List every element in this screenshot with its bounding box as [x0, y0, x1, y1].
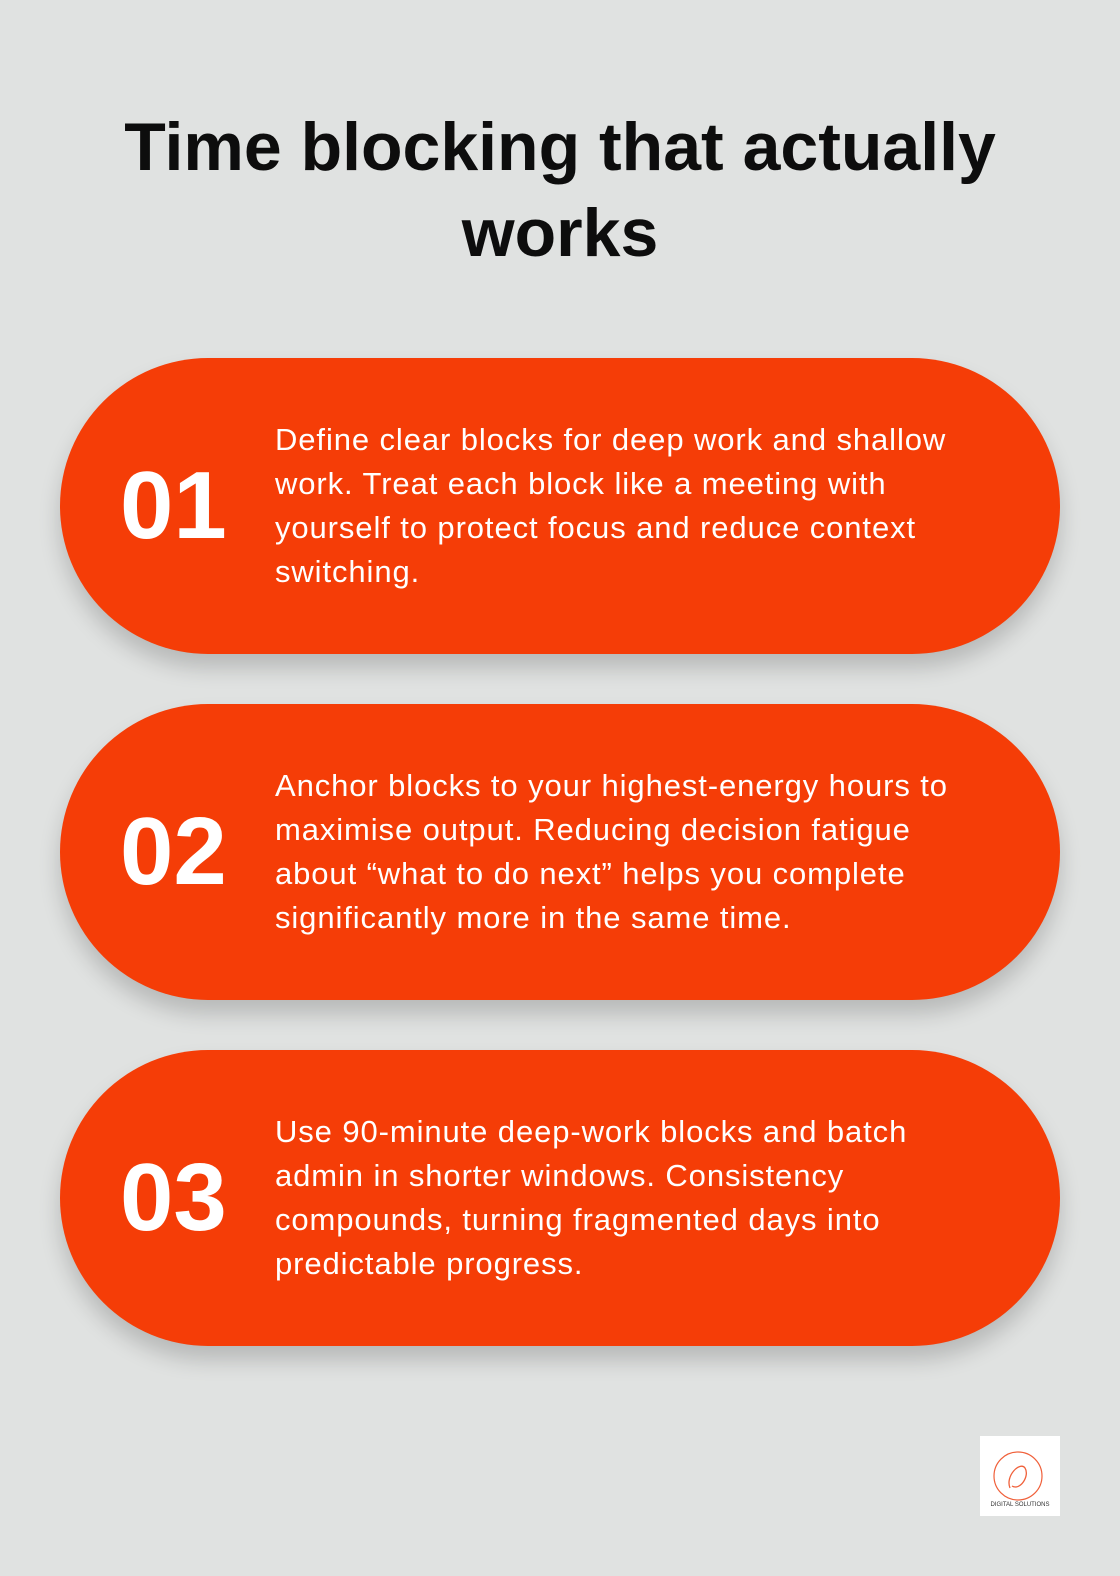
text 01: work. Treat each block like a meeting with: [275, 466, 887, 501]
text 02: significantly more in the same time.: [275, 900, 792, 935]
number 03: 03: [120, 1144, 227, 1251]
text 01: Define clear blocks for deep work and shallow: [275, 422, 946, 457]
text 02: [275, 768, 948, 935]
text 03: predictable progress.: [275, 1246, 583, 1281]
text 03: [275, 1114, 907, 1281]
text 02: about “what to do next” helps you complete: [275, 856, 906, 891]
logo: [980, 1436, 1060, 1516]
text 01: yourself to protect focus and reduce context: [275, 510, 916, 545]
panel: step 02: [60, 704, 1060, 1000]
panel: step 03: [60, 1050, 1060, 1346]
text 02: maximise output. Reducing decision fatigue: [275, 812, 911, 847]
text 01: [275, 422, 946, 589]
number 02: 02: [120, 798, 227, 905]
title: [124, 109, 996, 271]
text 03: compounds, turning fragmented days into: [275, 1202, 880, 1237]
text 03: admin in shorter windows. Consistency: [275, 1158, 844, 1193]
title: Time blocking that actually: [124, 109, 996, 185]
panel: step 01: [60, 358, 1060, 654]
number 01: 01: [120, 452, 227, 559]
text 03: Use 90-minute deep-work blocks and batch: [275, 1114, 907, 1149]
text 01: switching.: [275, 554, 420, 589]
logo: DIGITAL SOLUTIONS: [990, 1502, 1050, 1508]
text 02: Anchor blocks to your highest-energy hours to: [275, 768, 948, 803]
title: works: [462, 195, 658, 271]
